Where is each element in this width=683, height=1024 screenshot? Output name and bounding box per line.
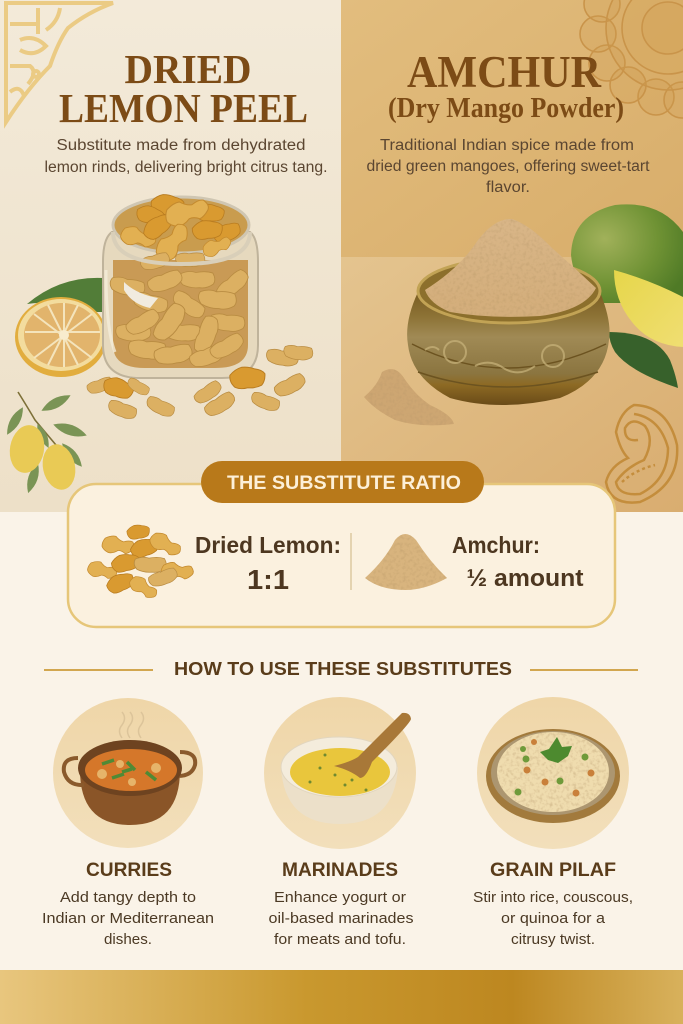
icon: loose lemon peel pieces	[86, 341, 314, 423]
icon: brass bowl with powder	[407, 219, 610, 405]
icon: paisley ornament	[606, 405, 677, 503]
use: curries	[42, 698, 214, 948]
text: curries: Indian or Mediterranean	[42, 910, 214, 927]
description: amchur: dried green mangoes, offering sweet-tart	[366, 158, 650, 175]
description: amchur	[366, 137, 650, 196]
icon: spilled powder	[364, 369, 454, 425]
use: grain pilaf	[473, 697, 633, 948]
ratio heading pill	[201, 461, 484, 503]
text: curries	[42, 889, 214, 948]
text: marinades: for meats and tofu.	[274, 931, 406, 948]
ratio: amchur: ½ amount	[466, 565, 584, 592]
mandala ornament	[580, 0, 683, 118]
icon: amchur powder pile	[365, 534, 447, 590]
footer band	[0, 970, 683, 1024]
title: dried lemon peel: LEMON PEEL	[59, 85, 308, 131]
title: dried lemon peel: DRIED	[124, 46, 252, 92]
icon: marinade bowl with spoon	[281, 713, 411, 824]
ratio: amchur	[452, 532, 584, 592]
panel: amchur	[341, 0, 683, 512]
corner ornament	[6, 3, 113, 122]
ratio: dried lemon: 1:1	[247, 564, 289, 595]
ratio: dried lemon: Dried Lemon:	[195, 532, 341, 558]
panel: substitute ratio	[68, 461, 615, 627]
icon: jar of dried lemon peel	[103, 195, 258, 378]
panel: dried lemon peel	[0, 0, 341, 512]
icon: dried lemon pile	[86, 523, 194, 604]
use: grain pilaf: GRAIN PILAF	[490, 860, 616, 881]
title: amchur: AMCHUR	[407, 47, 601, 97]
description: dried lemon peel: Substitute made from dehydrated	[56, 137, 306, 154]
title: dried lemon peel	[59, 46, 308, 131]
icon: mango leaf	[609, 332, 678, 388]
title: amchur	[388, 47, 624, 124]
title: amchur: (Dry Mango Powder)	[388, 92, 624, 124]
text: marinades: oil-based marinades	[268, 910, 414, 927]
ratio: dried lemon	[195, 532, 341, 595]
icon: curry pot	[64, 712, 195, 825]
description: dried lemon peel: lemon rinds, delivering bright citrus tang.	[44, 159, 328, 176]
icon: mango slice	[614, 270, 683, 347]
text: curries: dishes.	[104, 931, 152, 948]
description: amchur: Traditional Indian spice made from	[380, 137, 634, 154]
text: grain pilaf: Stir into rice, couscous,	[473, 889, 633, 906]
text: grain pilaf: or quinoa for a	[501, 910, 606, 927]
text: grain pilaf: citrusy twist.	[511, 931, 595, 948]
icon: green mango	[571, 204, 683, 303]
ratio: amchur: Amchur:	[452, 532, 540, 558]
text: marinades	[268, 889, 414, 948]
text: marinades: Enhance yogurt or	[274, 889, 406, 906]
use: marinades: MARINADES	[282, 860, 398, 881]
description: amchur: flavor.	[486, 179, 530, 196]
icon: lemon branch	[3, 391, 88, 495]
icon: pilaf plate	[486, 729, 620, 823]
use: marinades	[264, 697, 416, 948]
use: curries: CURRIES	[86, 860, 172, 881]
description: dried lemon peel	[44, 137, 328, 176]
icon: leaf behind lemon slice	[27, 278, 103, 312]
text: grain pilaf	[473, 889, 633, 948]
ratio heading pill: THE SUBSTITUTE RATIO	[227, 473, 461, 494]
text: curries: Add tangy depth to	[60, 889, 196, 906]
heading: how to use: HOW TO USE THESE SUBSTITUTES	[174, 658, 512, 679]
icon: dried lemon slice	[15, 297, 107, 377]
